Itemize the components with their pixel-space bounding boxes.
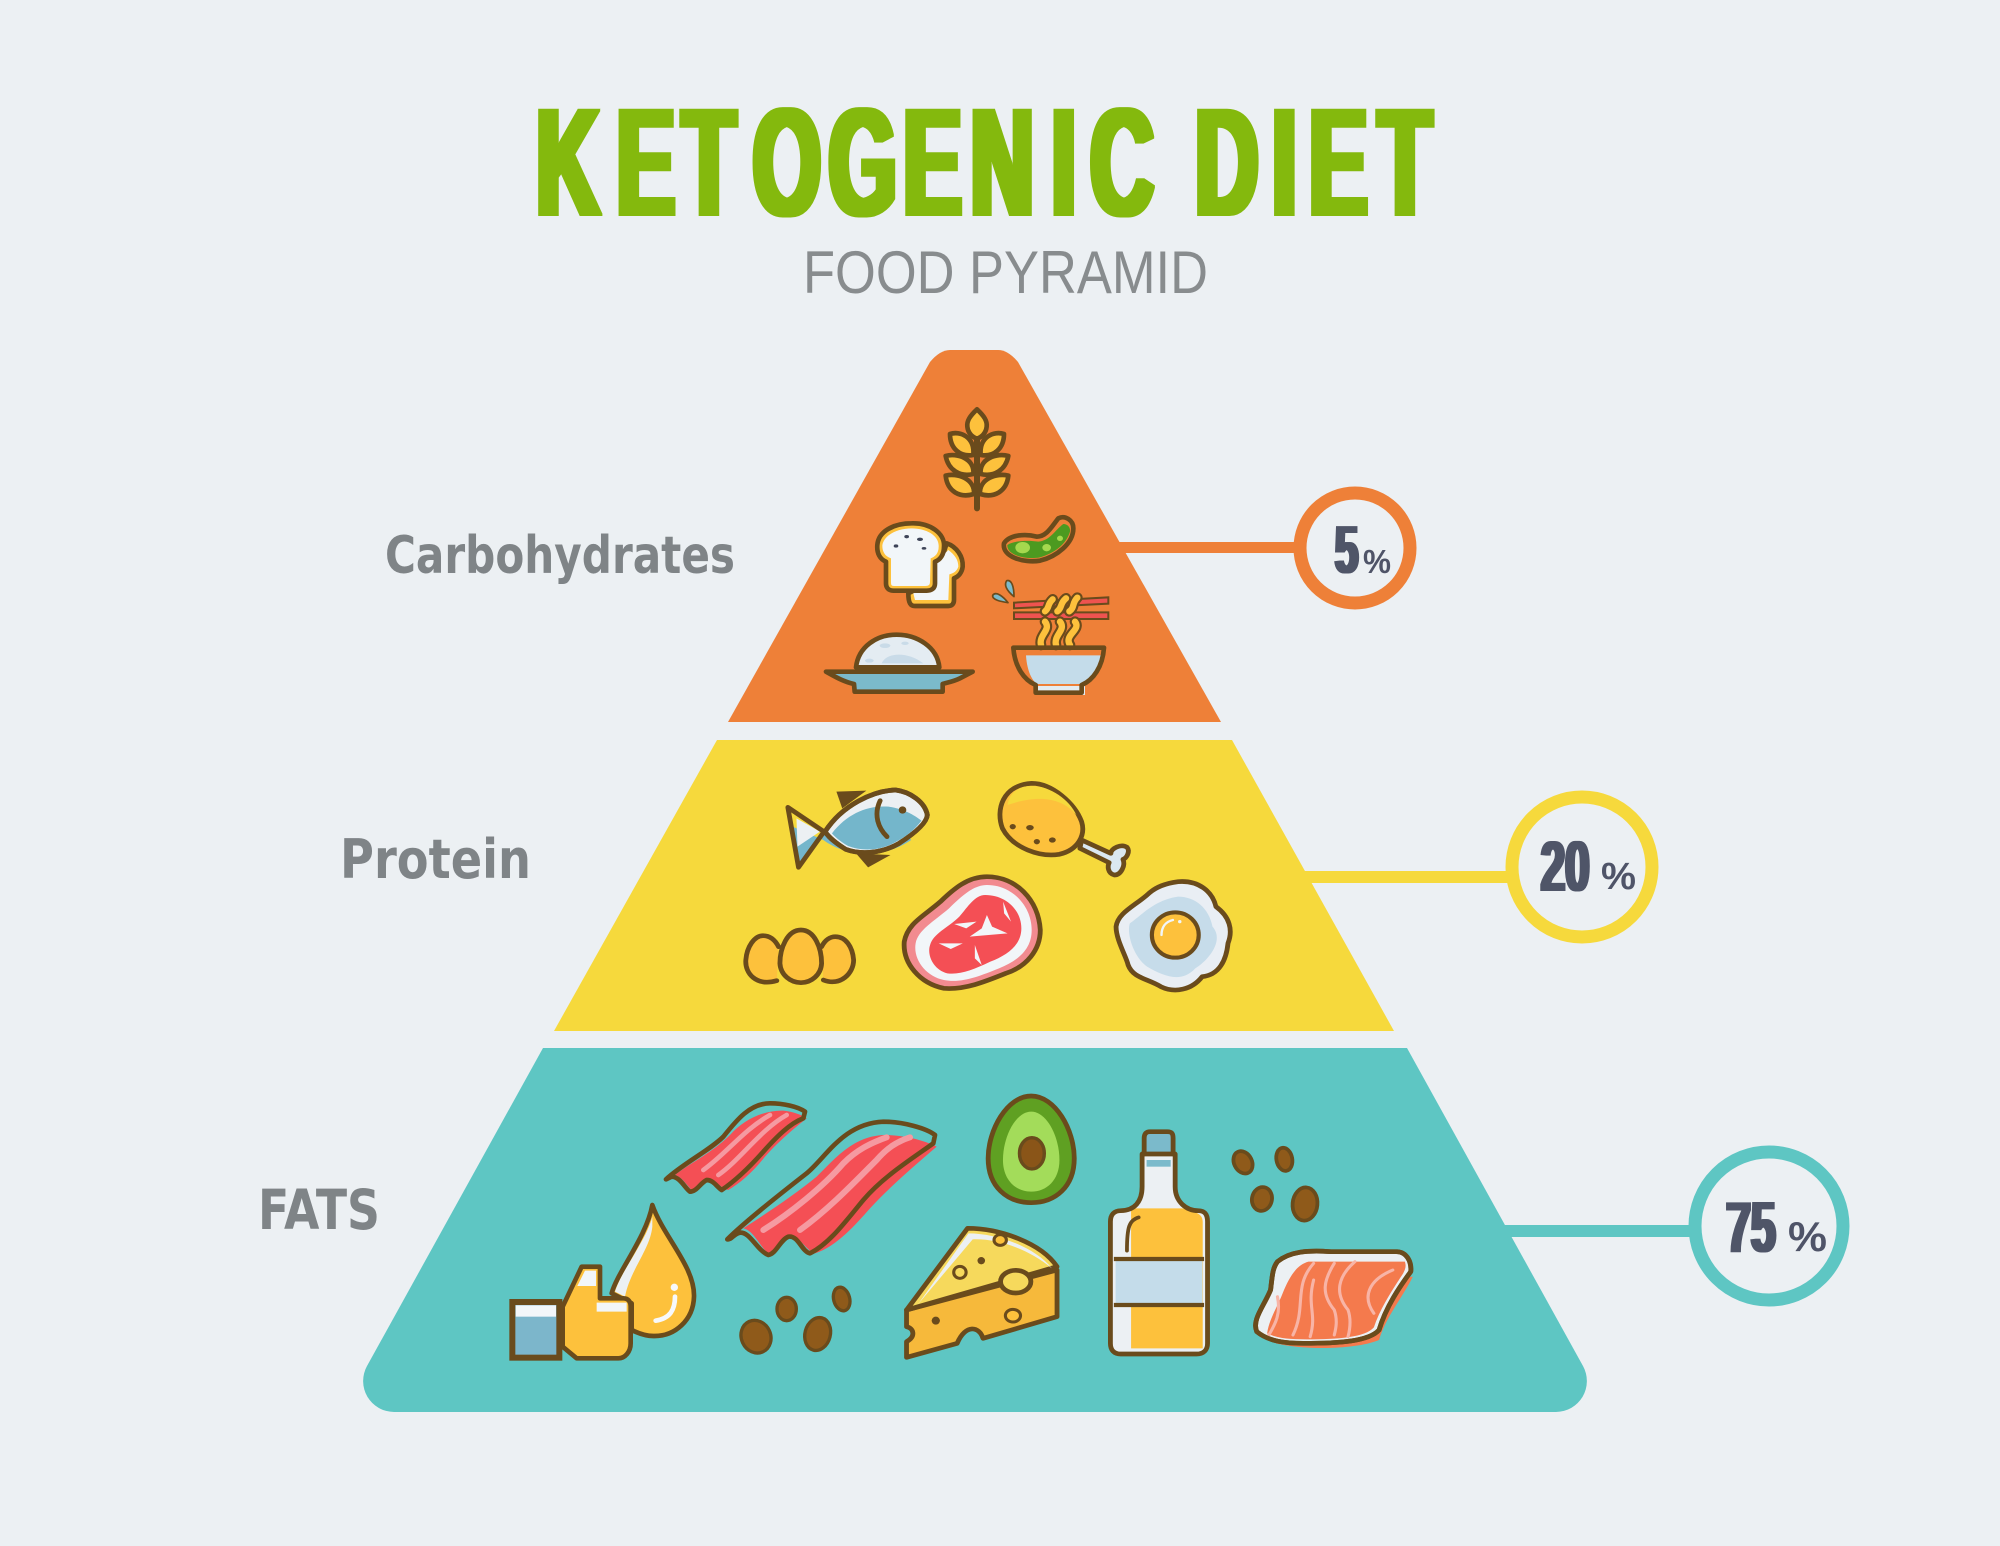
percentage badge: 75%: 75 xyxy=(1726,1187,1776,1268)
icon: cheese xyxy=(907,1228,1057,1357)
carbohydrate food icons xyxy=(826,409,1108,695)
icon: thumbs up xyxy=(512,1267,631,1358)
label: fats: FATS xyxy=(258,1178,380,1242)
icon: steak xyxy=(904,877,1040,989)
icon: chicken leg xyxy=(1000,783,1128,875)
percentage badge: 20%: 20 xyxy=(1541,827,1590,907)
connector: fats xyxy=(1500,1225,1695,1237)
connector: carbohydrates xyxy=(1118,542,1308,553)
icon: rice plate xyxy=(826,635,973,692)
icon: nuts xyxy=(736,1285,852,1358)
percentage badge: 5%: 5 xyxy=(1335,512,1358,587)
protein food icons xyxy=(746,783,1230,990)
icon: oil drop xyxy=(612,1205,694,1336)
title: KETOGENIC DIET xyxy=(536,77,1432,248)
pyramid tier: protein xyxy=(554,740,1394,1031)
icon: fried egg xyxy=(1116,882,1230,990)
icon: almonds xyxy=(1230,1147,1319,1222)
icon: oil bottle xyxy=(1110,1132,1208,1354)
icon: avocado xyxy=(988,1096,1074,1203)
pyramid tier: carbohydrates xyxy=(728,350,1221,722)
fat food icons: right group xyxy=(907,1096,1413,1357)
icon: salmon xyxy=(1256,1251,1413,1348)
percentage badge: 20%: % xyxy=(1601,856,1636,898)
pyramid tier: fats xyxy=(363,1048,1587,1412)
icon: noodles with chopsticks xyxy=(993,581,1108,645)
icon: fish xyxy=(788,790,927,867)
percentage badge: 5% xyxy=(1300,493,1410,603)
subtitle: FOOD PYRAMID xyxy=(803,239,1208,306)
icon: bowl xyxy=(1013,648,1104,695)
icon: pickle xyxy=(1004,517,1073,561)
fat food icons: left group xyxy=(512,1103,937,1358)
icon: bread xyxy=(877,523,963,606)
icon: wheat xyxy=(946,409,1008,508)
icon: eggs xyxy=(746,930,854,983)
icon: bacon small xyxy=(666,1103,807,1192)
percentage badge: 75%: % xyxy=(1788,1213,1827,1260)
label: protein: Protein xyxy=(340,828,531,891)
percentage badge: 20% xyxy=(1512,797,1652,937)
percentage badge: 5%: % xyxy=(1363,543,1391,580)
icon: bacon large xyxy=(727,1122,937,1255)
connector: protein xyxy=(1305,871,1510,883)
label: carbohydrates: Carbohydrates xyxy=(385,526,735,586)
percentage badge: 75% xyxy=(1695,1152,1843,1300)
